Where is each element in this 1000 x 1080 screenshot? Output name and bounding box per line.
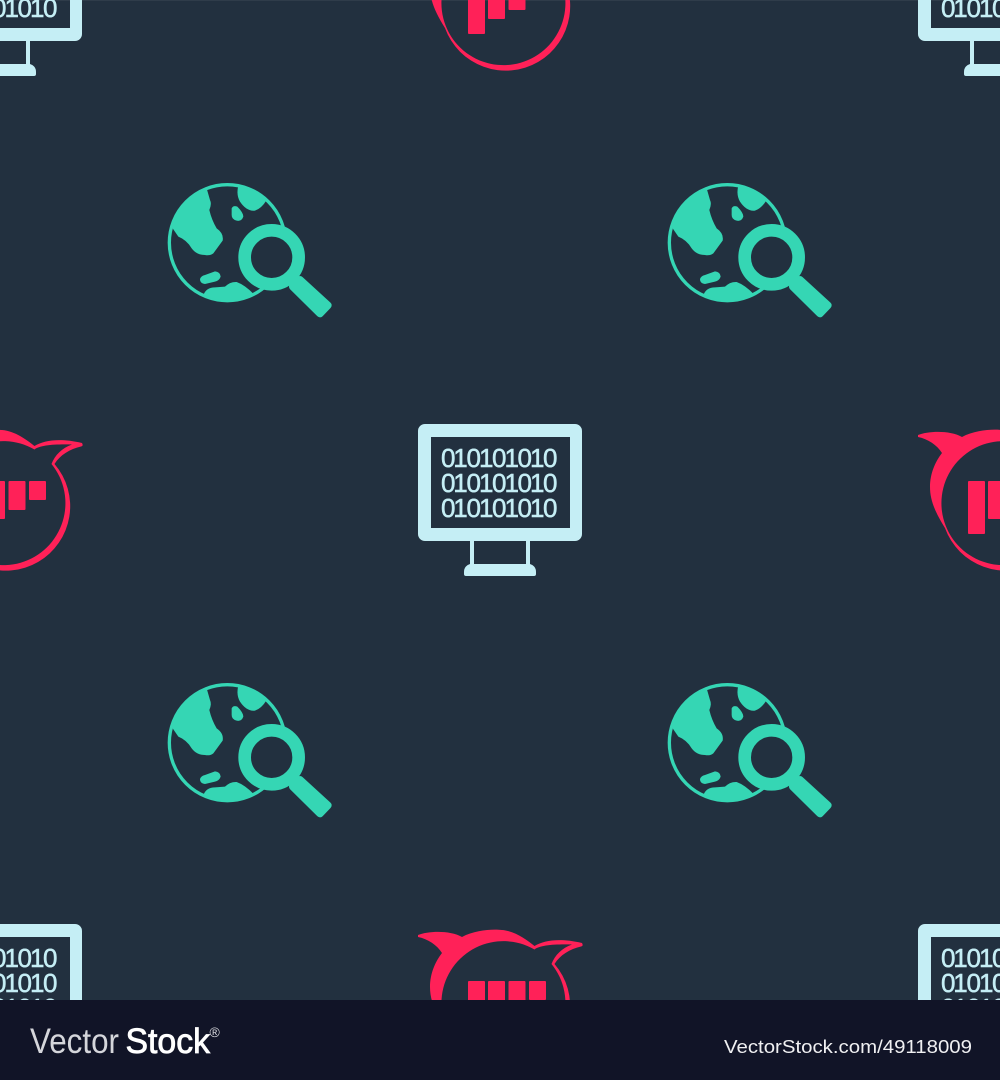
icon: pink chat shape with bars, bottom edge bbox=[418, 930, 583, 1071]
icon: binary monitor, center: 010101010 bbox=[441, 493, 557, 523]
icon: globe with magnifier, bottom left bbox=[169, 685, 328, 814]
icon: binary monitor, center: 010101010 bbox=[441, 468, 557, 498]
icon: pink chat shape with bars, top edge bbox=[418, 0, 583, 71]
footer bar bbox=[0, 1000, 1000, 1080]
icon: globe with magnifier, top right bbox=[669, 185, 828, 314]
icon: binary monitor, bottom left corner bbox=[0, 924, 82, 1076]
icon: binary monitor, top left corner bbox=[0, 0, 82, 76]
icon: pink chat shape with bars, left edge bbox=[0, 430, 83, 571]
footer logo: VectorStock bbox=[30, 1022, 220, 1061]
icon: globe with magnifier, bottom right bbox=[669, 685, 828, 814]
icon: pink chat shape with bars, right edge bbox=[918, 430, 1000, 571]
icon: binary monitor, center: 010101010 bbox=[441, 443, 557, 473]
footer logo: VectorStock: ® bbox=[210, 1024, 220, 1040]
icon: binary monitor, center bbox=[418, 424, 582, 576]
icon: binary monitor, bottom right corner bbox=[918, 924, 1000, 1076]
footer image id: VectorStock.com/49118009 bbox=[724, 1036, 972, 1057]
icon: globe with magnifier, top left bbox=[169, 185, 328, 314]
icon: binary monitor, top right corner bbox=[918, 0, 1000, 76]
footer logo: VectorStock: Vector bbox=[30, 1022, 119, 1061]
footer logo: VectorStock: Stock bbox=[126, 1022, 210, 1061]
